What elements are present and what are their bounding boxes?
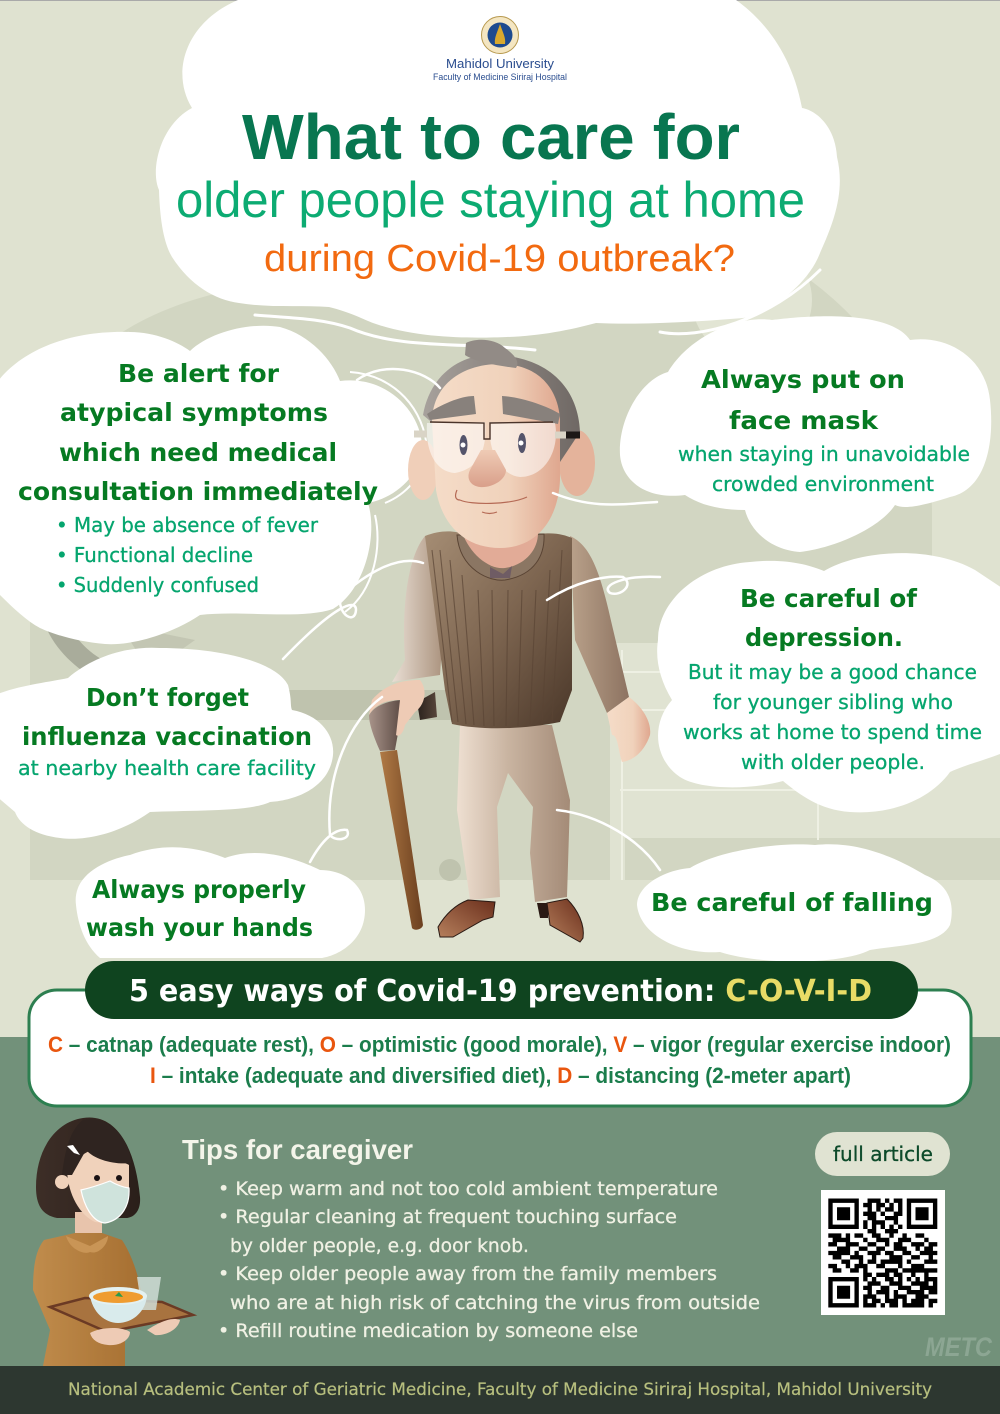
text: be alert for atypical symptoms: which need medical	[59, 438, 337, 467]
cloud: face mask	[620, 316, 991, 552]
caregiver neck	[75, 1212, 102, 1244]
cloud: atypical symptoms	[0, 326, 427, 644]
prevention line one: C – catnap (adequate rest), O – optimistic (good morale), V – vigor (regular exercise indoor)	[48, 1032, 951, 1057]
text: be alert for atypical symptoms	[18, 359, 378, 597]
prevention line two: I – intake (adequate and diversified diet), D – distancing (2-meter apart)	[150, 1063, 851, 1088]
cane grip	[369, 700, 404, 751]
tips list: by older people, e.g. door knob.	[230, 1235, 529, 1257]
tips list: • Regular cleaning at frequent touching surface	[218, 1206, 677, 1228]
text: be alert for atypical symptoms: Be alert for	[118, 359, 280, 388]
footer bar	[0, 1366, 1000, 1414]
cane	[380, 692, 437, 930]
face mask	[81, 1181, 129, 1223]
text: be alert for atypical symptoms: consultation immediately	[18, 477, 378, 506]
text: face mask: crowded environment	[712, 472, 934, 496]
text: influenza vaccination: influenza vaccination	[22, 722, 312, 751]
text: be careful of depression: for younger sibling who	[713, 690, 953, 714]
text: be careful of depression: depression.	[745, 623, 903, 652]
soup bowl	[89, 1287, 147, 1323]
hands	[369, 680, 650, 762]
cloud: title	[156, 0, 840, 350]
text: influenza vaccination: Don’t forget	[86, 683, 249, 712]
glasses	[414, 422, 580, 477]
callout lines	[283, 369, 660, 870]
caregiver face	[67, 1150, 129, 1222]
text: be careful of depression: Be careful of	[740, 584, 918, 613]
title: What to care for	[242, 101, 740, 173]
tray	[50, 1298, 193, 1332]
ears	[408, 430, 595, 500]
METC mark: METC	[925, 1332, 992, 1362]
text: wash your hands: wash your hands	[86, 913, 313, 942]
cloud: wash hands	[76, 847, 365, 958]
tips list: who are at high risk of catching the virus from outside	[230, 1292, 760, 1314]
text: be careful of depression	[683, 584, 982, 774]
hair clip	[67, 1145, 80, 1155]
tips list: • Refill routine medication by someone else	[218, 1320, 638, 1342]
figure: older man with cane	[369, 340, 650, 942]
text: wash your hands: Always properly	[92, 875, 306, 904]
text: be alert for atypical symptoms: • Suddenly confused	[56, 573, 259, 597]
glass	[137, 1277, 161, 1310]
caregiver fringe	[62, 1119, 131, 1175]
lower section background	[0, 1037, 1000, 1366]
hair back	[423, 355, 580, 462]
nose	[468, 450, 506, 487]
caregiver dress	[33, 1233, 141, 1366]
shoes	[438, 899, 583, 942]
text: be careful of depression: with older people.	[741, 750, 925, 774]
text: face mask: Always put on	[701, 365, 905, 394]
text: be alert for atypical symptoms: atypical symptoms	[60, 398, 328, 427]
caregiver hands	[90, 1319, 180, 1345]
tips list: • Keep older people away from the family members	[218, 1263, 717, 1285]
mouth	[456, 490, 527, 514]
prevention box	[29, 990, 971, 1106]
text: face mask	[678, 365, 970, 496]
prevention heading: 5 easy ways of Covid-19 prevention: C-O-V-I-D	[129, 974, 872, 1009]
caregiver eyes	[94, 1175, 122, 1181]
tips list: • Keep warm and not too cold ambient temperature	[218, 1178, 718, 1200]
panel: C-O-V-I-D prevention	[29, 961, 971, 1106]
logo: Mahidol University: Faculty of Medicine Siriraj Hospital	[433, 72, 567, 83]
hair tuft	[465, 340, 517, 368]
trousers	[457, 725, 570, 902]
logo: Mahidol University	[433, 16, 567, 83]
top edge line	[0, 0, 1000, 1]
title: during Covid-19 outbreak?	[264, 238, 735, 280]
eyebrows	[427, 396, 560, 424]
tips heading: Tips for caregiver	[182, 1134, 413, 1165]
full article pill: full article	[833, 1142, 933, 1166]
figure: caregiver with tray	[33, 1117, 193, 1366]
eyes	[460, 433, 526, 455]
cloud: influenza vaccination	[0, 648, 333, 839]
face	[432, 364, 560, 548]
head	[408, 340, 595, 548]
cloud: falling	[637, 844, 952, 962]
text: face mask: when staying in unavoidable	[678, 442, 970, 466]
QR code	[821, 1190, 945, 1315]
text: influenza vaccination	[18, 683, 316, 780]
text: be careful of depression: works at home to spend time	[683, 720, 982, 744]
text: be alert for atypical symptoms: • Functional decline	[56, 543, 253, 567]
text: influenza vaccination: at nearby health care facility	[18, 756, 316, 780]
title	[176, 101, 805, 280]
text: be careful of falling: Be careful of falling	[651, 888, 933, 917]
panel: tips for caregiver	[182, 1134, 760, 1342]
title: older people staying at home	[176, 172, 805, 228]
cloud: depression	[657, 553, 1000, 812]
text: wash your hands	[86, 875, 313, 942]
logo: Mahidol University: Mahidol University	[446, 56, 555, 71]
text: face mask: face mask	[729, 406, 879, 435]
caregiver ear	[55, 1175, 69, 1189]
text: be careful of depression: But it may be a good chance	[688, 660, 977, 684]
footer text: National Academic Center of Geriatric Medicine, Faculty of Medicine Siriraj Hospital, Mahidol University	[68, 1380, 932, 1399]
caregiver hair	[36, 1117, 140, 1218]
arms	[392, 536, 629, 713]
tips list	[218, 1178, 760, 1342]
text: be alert for atypical symptoms: • May be absence of fever	[56, 513, 319, 537]
prevention heading banner	[85, 961, 918, 1019]
caregiver collar	[66, 1236, 108, 1253]
full article pill	[815, 1132, 950, 1176]
sweater vest	[425, 531, 572, 728]
